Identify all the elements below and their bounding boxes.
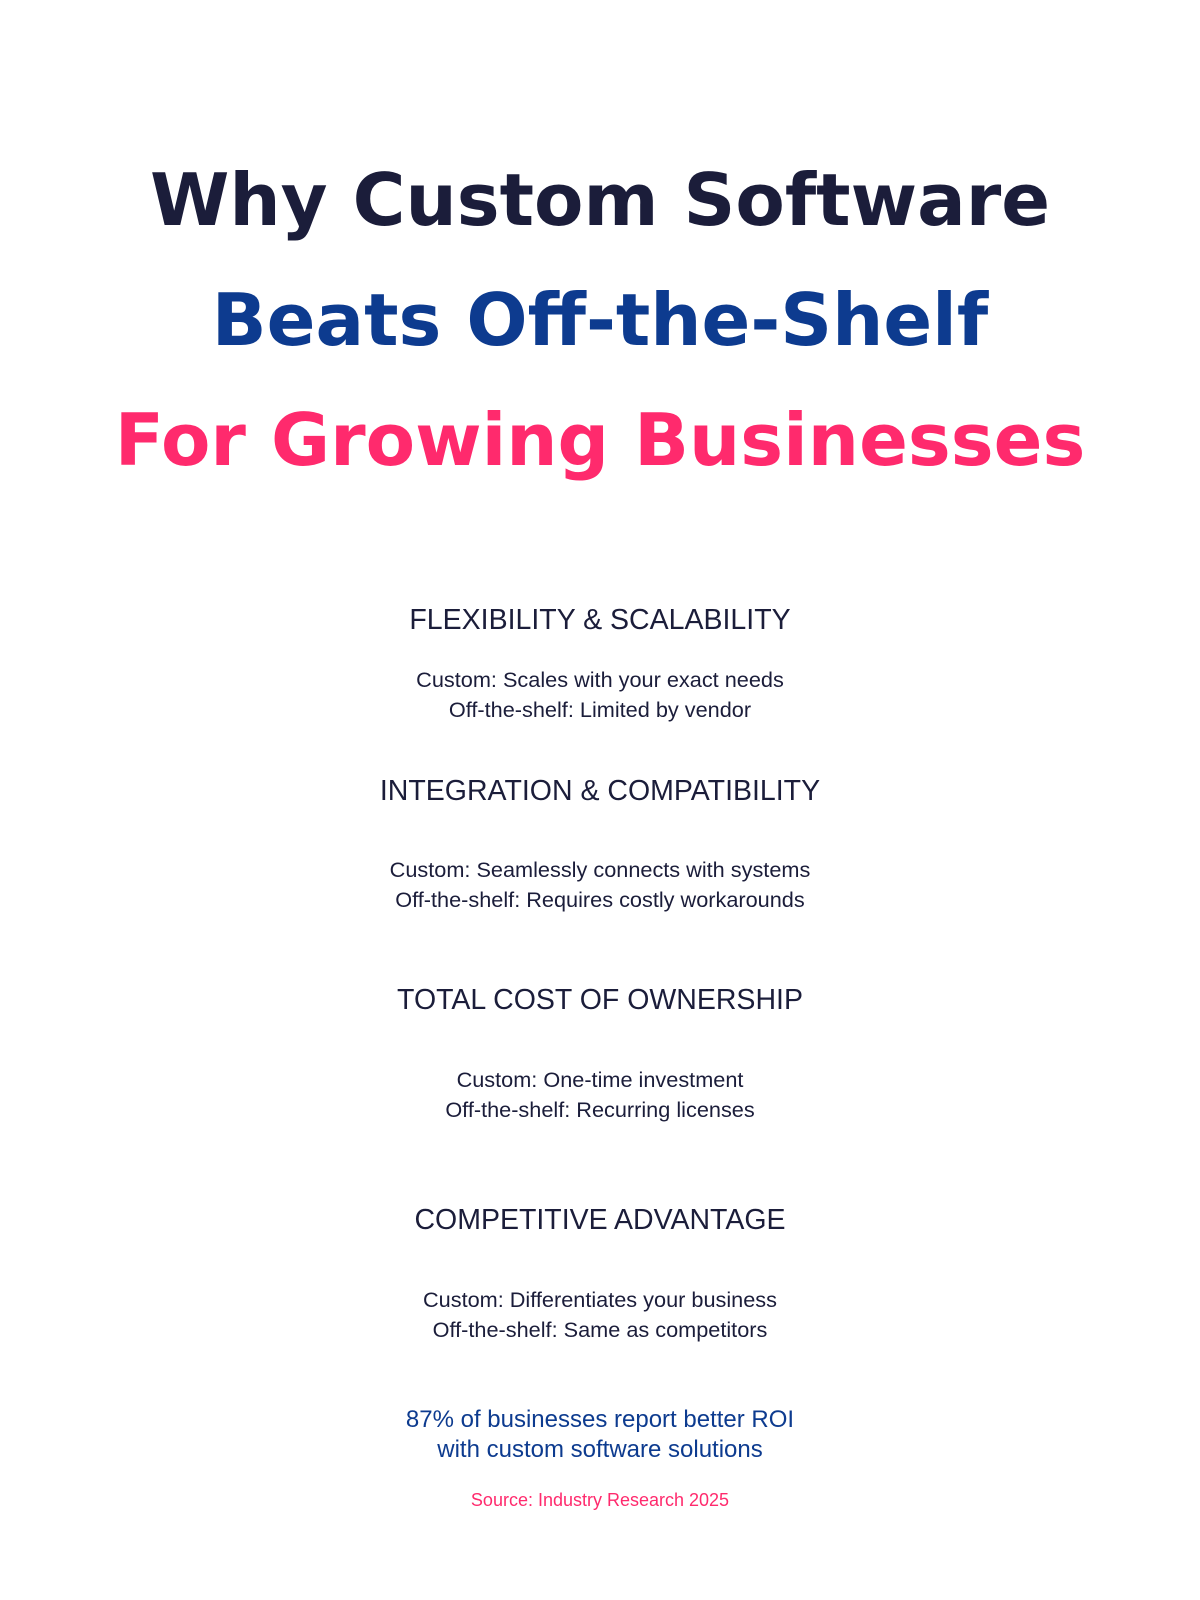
heading: cost: TOTAL COST OF OWNERSHIP — [397, 984, 803, 1016]
text: competitive — [423, 1287, 777, 1342]
text: cost: Off-the-shelf: Recurring licenses — [445, 1097, 755, 1122]
text: competitive: Custom: Differentiates your business — [423, 1287, 777, 1312]
title line 1: Why Custom Software — [150, 158, 1050, 242]
text: flexibility — [416, 667, 784, 722]
text: integration: Off-the-shelf: Requires costly workarounds — [395, 887, 805, 912]
heading: integration: INTEGRATION & COMPATIBILITY — [380, 775, 820, 807]
stat callout: with custom software solutions — [437, 1436, 763, 1463]
stat callout — [406, 1406, 794, 1463]
text: cost — [445, 1067, 755, 1122]
heading: flexibility: FLEXIBILITY & SCALABILITY — [409, 604, 791, 636]
text: integration — [390, 857, 810, 912]
text: cost: Custom: One-time investment — [457, 1067, 743, 1092]
heading: competitive: COMPETITIVE ADVANTAGE — [414, 1204, 786, 1236]
text: integration: Custom: Seamlessly connects with systems — [390, 857, 810, 882]
stat callout: 87% of businesses report better ROI — [406, 1406, 794, 1433]
source: Source: Industry Research 2025 — [471, 1490, 729, 1510]
text: competitive: Off-the-shelf: Same as competitors — [433, 1317, 767, 1342]
title line 3: For Growing Businesses — [115, 398, 1085, 482]
title line 2: Beats Off-the-Shelf — [212, 278, 988, 362]
text: flexibility: Off-the-shelf: Limited by vendor — [449, 697, 751, 722]
text: flexibility: Custom: Scales with your exact needs — [416, 667, 784, 692]
